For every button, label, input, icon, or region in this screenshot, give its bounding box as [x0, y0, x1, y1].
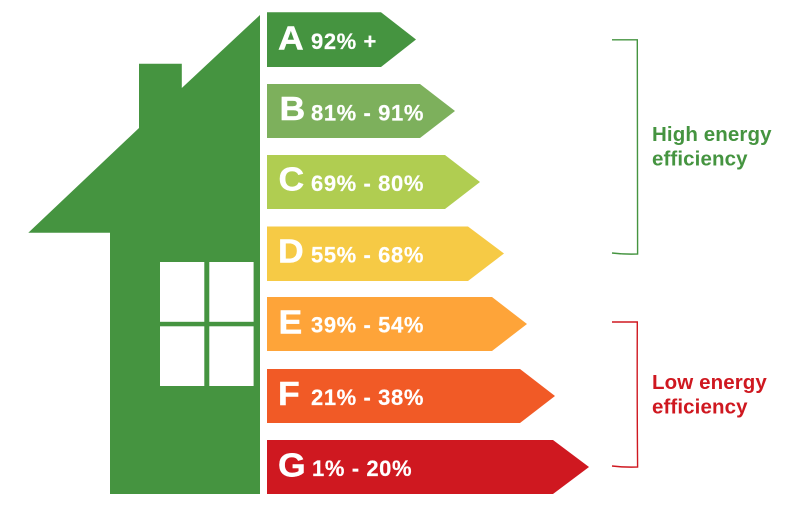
rating D	[267, 226, 504, 281]
rating E: E	[278, 304, 302, 341]
bracket: high energy	[612, 40, 638, 254]
rating E: 39% - 54%	[311, 313, 424, 338]
rating D: D	[278, 234, 304, 270]
rating C	[267, 155, 480, 209]
label: high energy efficiency: efficiency	[652, 148, 748, 170]
label: low energy efficiency: efficiency	[652, 396, 748, 418]
rating E	[267, 297, 527, 351]
label: low energy efficiency: Low energy	[652, 371, 767, 394]
rating F: F	[278, 376, 300, 413]
rating A	[267, 12, 416, 67]
label: high energy efficiency: High energy	[652, 123, 772, 146]
rating B	[267, 84, 455, 138]
rating A: 92% +	[311, 29, 377, 54]
rating C: C	[278, 162, 304, 198]
rating F	[267, 369, 555, 423]
bracket: low energy	[612, 322, 638, 467]
rating G	[267, 440, 589, 494]
rating B: B	[280, 91, 305, 128]
rating D: 55% - 68%	[311, 243, 424, 268]
icon: window	[160, 262, 254, 386]
rating A: A	[278, 20, 304, 57]
rating C: 69% - 80%	[311, 171, 424, 196]
rating B: 81% - 91%	[311, 100, 424, 126]
icon: house	[28, 15, 260, 494]
rating F: 21% - 38%	[311, 385, 424, 410]
rating G: 1% - 20%	[312, 456, 412, 481]
rating G: G	[278, 448, 306, 484]
